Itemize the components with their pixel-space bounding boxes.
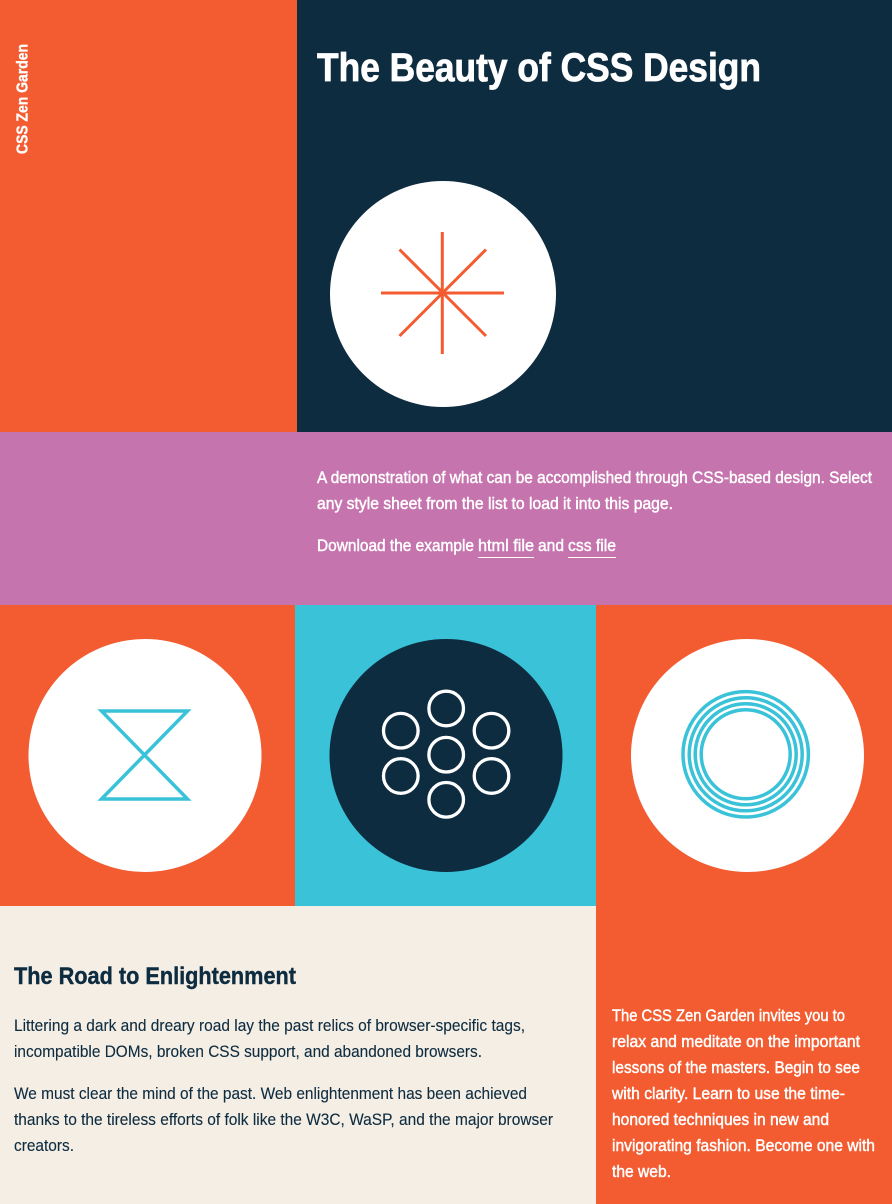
panel: circle cluster xyxy=(295,605,596,906)
quote text: lessons of the masters. Begin to see xyxy=(612,1059,860,1077)
download links: html file xyxy=(478,537,534,555)
panel: introduction xyxy=(0,432,892,605)
title: The Beauty of CSS Design xyxy=(317,46,761,90)
quote text: relax and meditate on the important xyxy=(612,1033,860,1051)
quote text: invigorating fashion. Become one with xyxy=(612,1137,875,1155)
download links: Download the example xyxy=(317,537,474,555)
quote text: with clarity. Learn to use the time- xyxy=(611,1085,845,1103)
intro paragraph xyxy=(317,469,872,513)
quote text: the web. xyxy=(612,1163,671,1181)
paragraph one: Littering a dark and dreary road lay the past relics of browser-specific tags, xyxy=(14,1017,525,1035)
panel: hourglass xyxy=(0,605,295,906)
download links: css file xyxy=(568,537,616,555)
paragraph two xyxy=(14,1085,553,1155)
quote text: The CSS Zen Garden invites you to xyxy=(612,1007,845,1025)
intro paragraph: any style sheet from the list to load it into this page. xyxy=(317,495,673,513)
paragraph two: thanks to the tireless efforts of folk like the W3C, WaSP, and the major browser xyxy=(14,1111,553,1129)
quote text: honored techniques in new and xyxy=(612,1111,829,1129)
icon: seven circles in navy circle xyxy=(330,639,562,872)
paragraph two: creators. xyxy=(14,1137,74,1155)
panel: side quote xyxy=(596,605,892,1204)
panel: title header xyxy=(297,0,892,432)
paragraph one: incompatible DOMs, broken CSS support, and abandoned browsers. xyxy=(14,1043,482,1061)
site name: CSS Zen Garden xyxy=(14,44,32,154)
quote text xyxy=(611,1007,875,1181)
paragraph two: We must clear the mind of the past. Web enlightenment has been achieved xyxy=(14,1085,527,1103)
paragraph one xyxy=(14,1017,525,1061)
icon: hourglass in white circle xyxy=(28,639,262,872)
icon: concentric rings in white circle xyxy=(631,639,864,872)
heading: The Road to Enlightenment xyxy=(14,963,296,990)
download links xyxy=(317,537,616,558)
panel: site name sidebar xyxy=(0,0,297,432)
icon: star in white circle xyxy=(330,181,556,407)
download links: and xyxy=(538,537,564,555)
panel: road to enlightenment xyxy=(0,906,596,1204)
